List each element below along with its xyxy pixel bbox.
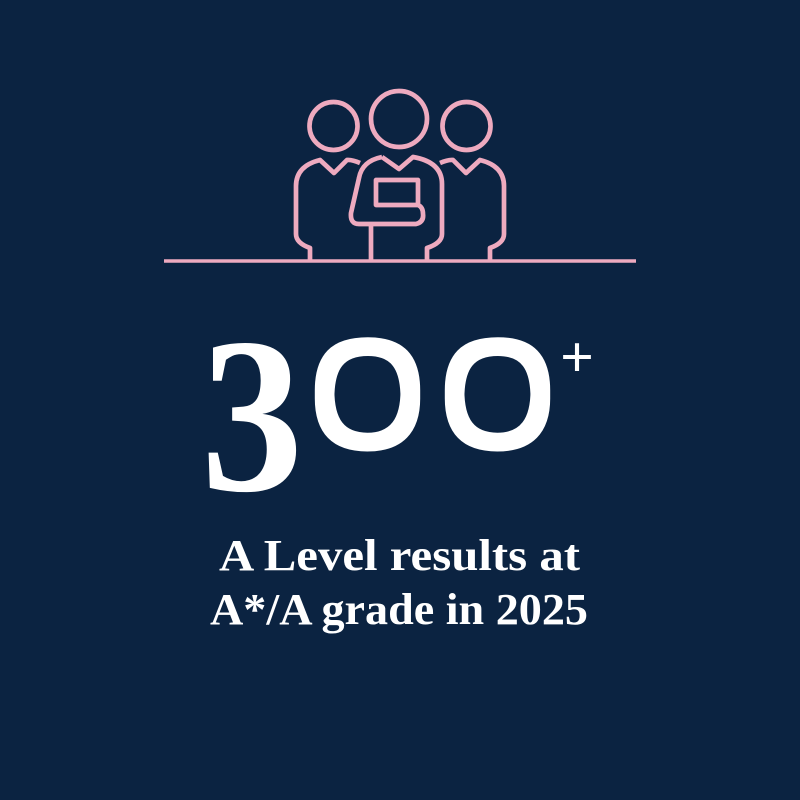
big number: 300+	[201, 293, 594, 539]
caption: A*/A grade in 2025	[210, 585, 588, 634]
big number: 300+: 0	[436, 310, 559, 478]
big number: 300+: 3	[201, 293, 303, 539]
caption: A Level results at	[219, 531, 580, 580]
big number: 300+: 0	[306, 310, 429, 478]
icon: three people standing behind a line	[164, 91, 636, 261]
caption	[210, 531, 588, 634]
big number: 300+: +	[560, 325, 594, 389]
